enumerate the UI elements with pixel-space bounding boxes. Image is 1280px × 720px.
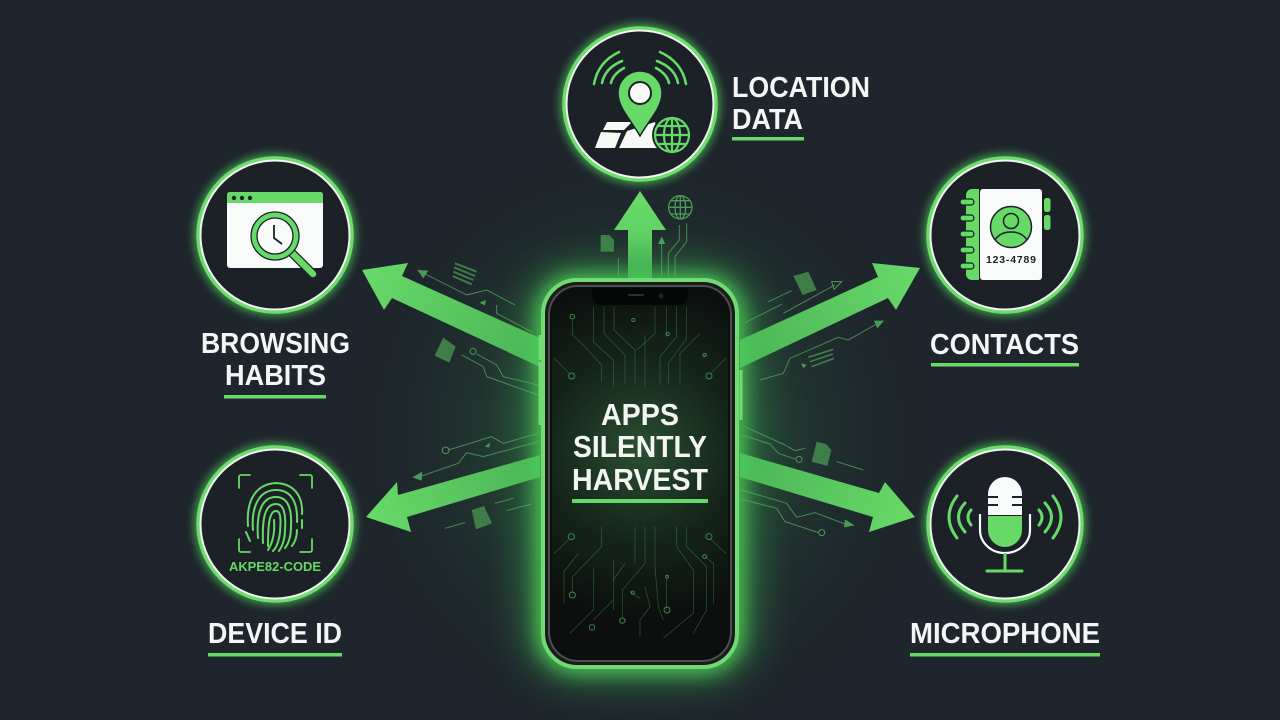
icon: fingerprint — [239, 475, 312, 552]
panel: location data — [560, 24, 870, 184]
label: location data — [732, 72, 870, 140]
icon: address book — [960, 189, 1050, 280]
label: location data: DATA — [732, 104, 803, 136]
icon: address book: 123-4789 — [986, 254, 1036, 266]
label: browsing habits — [201, 328, 350, 398]
panel: contacts — [924, 154, 1086, 366]
label: microphone: MICROPHONE — [910, 618, 1100, 650]
circuit traces near microphone arrow — [742, 427, 863, 536]
icon: location pin with map and globe — [594, 52, 692, 155]
label: contacts: CONTACTS — [930, 329, 1079, 361]
label: location data: LOCATION — [732, 72, 870, 104]
arrow: to browsing habits — [362, 263, 540, 367]
circuit pattern on screen — [554, 307, 726, 638]
location ring — [560, 24, 720, 184]
panel: browsing habits — [194, 154, 356, 398]
phone outer glow — [530, 272, 750, 676]
notch — [592, 288, 688, 305]
circuit traces near contacts arrow — [745, 272, 884, 380]
arrow: to contacts — [740, 263, 920, 368]
phone title: APPS — [601, 397, 679, 432]
label: browsing habits: BROWSING — [201, 328, 350, 360]
arrow: to device id — [366, 455, 540, 532]
contacts ring — [924, 154, 1086, 316]
label: browsing habits: HABITS — [225, 360, 326, 392]
phone title: HARVEST — [572, 462, 708, 497]
arrow: to microphone — [740, 453, 915, 532]
phone title — [572, 397, 708, 503]
phone — [530, 272, 750, 676]
phone screen — [552, 289, 728, 658]
panel: device id — [194, 443, 356, 656]
icon: microphone — [949, 477, 1061, 571]
device id ring — [194, 443, 356, 605]
device code: AKPE82-CODE — [229, 560, 321, 574]
microphone ring — [924, 443, 1086, 605]
phone body — [543, 280, 737, 667]
circuit traces and icons above phone — [601, 196, 692, 277]
phone glow — [536, 274, 744, 674]
circuit traces near browsing arrow — [417, 263, 538, 395]
circuit traces near device id arrow — [412, 433, 538, 529]
arrow: up to location data — [614, 191, 666, 280]
panel: microphone — [910, 443, 1100, 656]
icon: browser window with magnifier and clock — [227, 192, 323, 274]
browsing ring — [194, 154, 356, 316]
side buttons — [540, 335, 741, 425]
phone title: SILENTLY — [573, 429, 707, 464]
label: device id: DEVICE ID — [208, 618, 342, 650]
